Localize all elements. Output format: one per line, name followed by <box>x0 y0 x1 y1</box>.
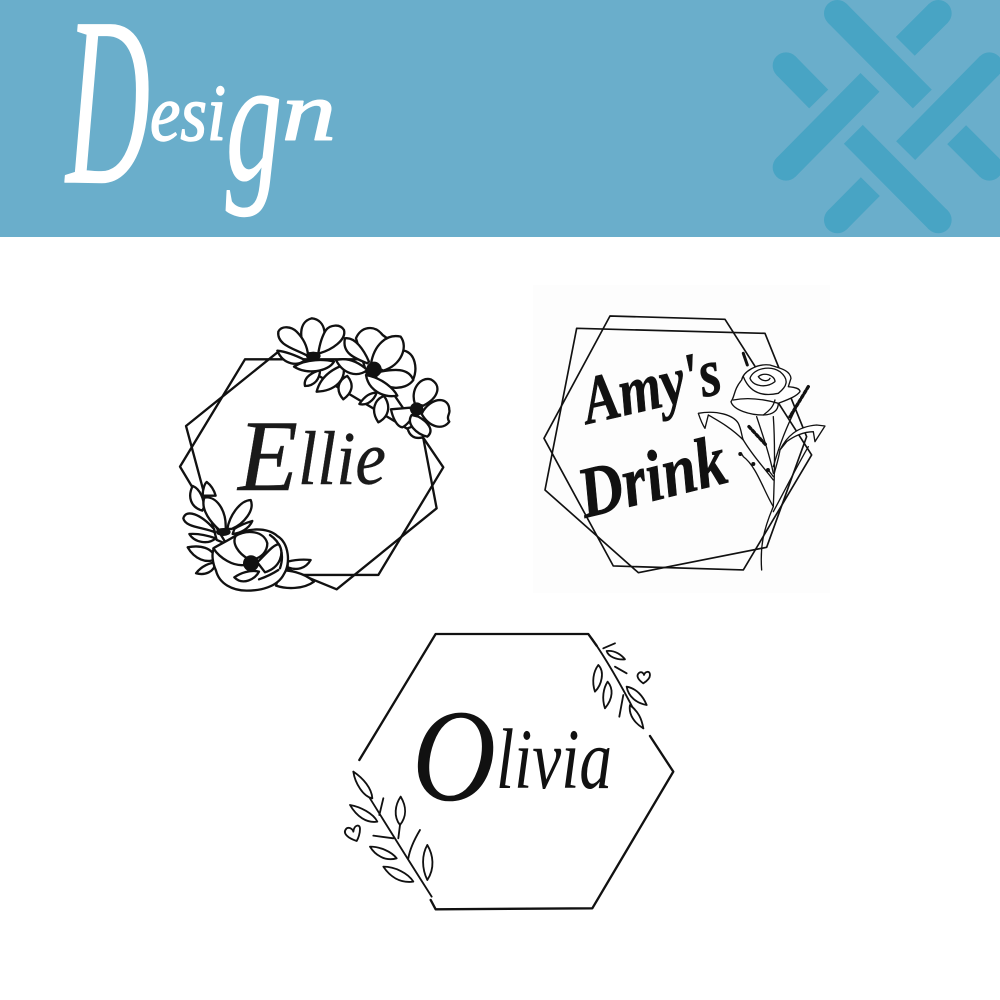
icon: bottom flowers <box>183 482 314 591</box>
name: Olivia: O <box>412 682 496 829</box>
name: Drink: Drink <box>569 420 734 534</box>
header banner <box>0 0 1000 237</box>
icon: top flowers <box>277 318 450 438</box>
title: Design: n <box>282 66 336 159</box>
panel: Ellie design <box>180 318 450 591</box>
icon: woven cross logo <box>773 0 1000 233</box>
title: Design: esi <box>150 70 226 158</box>
icon: rose with stems <box>698 353 825 570</box>
name: Ellie: llie <box>298 417 386 501</box>
name: Ellie: E <box>236 400 298 513</box>
hexagon frames <box>180 352 443 589</box>
icon: bottom left sprig <box>345 772 432 897</box>
name: Amy's: Amy's <box>571 333 728 439</box>
hexagon frames <box>544 316 812 573</box>
name: Olivia: livia <box>496 711 612 807</box>
image backdrop <box>533 285 830 593</box>
title: Design: g <box>226 23 282 218</box>
icon: top right sprig <box>592 638 650 728</box>
hexagon frame <box>359 634 673 909</box>
panel: Olivia design <box>345 634 673 909</box>
panel: Amy's Drink design <box>533 285 830 593</box>
